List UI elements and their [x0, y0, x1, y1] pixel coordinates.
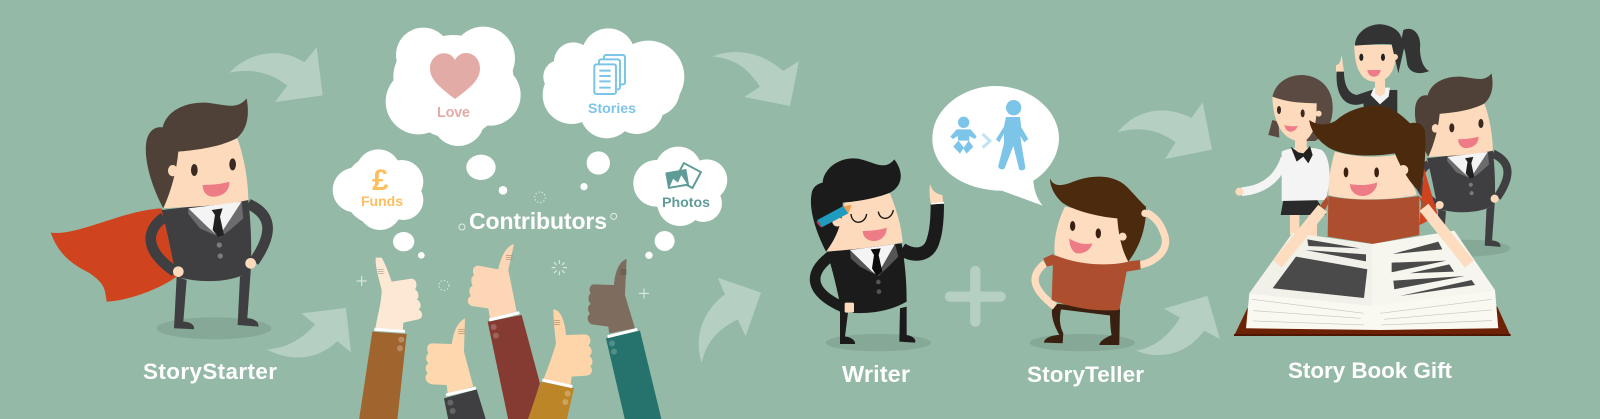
hand 4: mustard sleeve	[528, 309, 592, 419]
cloud: Funds	[333, 149, 423, 230]
arrow: Contributors to Writer bottom	[699, 278, 761, 363]
label: StoryTeller: StoryTeller	[1027, 362, 1144, 387]
speech bubble with baby to adult icons	[932, 86, 1059, 206]
character: StoryTeller	[1030, 177, 1166, 351]
open book	[1234, 231, 1511, 336]
cloud: Funds: £	[372, 164, 389, 197]
label: Writer: Writer	[842, 361, 910, 387]
arrow: StoryTeller to Book top	[1118, 102, 1212, 159]
label: Funds: Funds	[361, 193, 403, 209]
character: StoryStarter superhero	[51, 98, 271, 339]
cloud: Love	[386, 27, 521, 146]
character: boy reading with open book	[1234, 106, 1511, 336]
cloud group: Contributors thoughts	[333, 27, 727, 259]
label: Stories: Stories	[588, 101, 636, 117]
arrow: StoryStarter to Contributors top	[229, 47, 323, 102]
label: Story Book Gift: Story Book Gift	[1288, 358, 1453, 383]
heading: Contributors: Contributors	[469, 208, 607, 234]
label: Love: Love	[437, 105, 470, 121]
character: ponytail woman	[1336, 24, 1429, 115]
icon: baby	[950, 117, 977, 154]
label: Photos: Photos	[662, 195, 710, 211]
arrow: StoryStarter to Contributors bottom	[267, 308, 351, 357]
icon: adult	[996, 100, 1028, 170]
icon: plus sign	[950, 271, 1001, 322]
arrow: StoryTeller to Book bottom	[1136, 296, 1220, 355]
decorative rings	[459, 192, 617, 230]
raised thumbs-up hands	[357, 244, 662, 419]
cloud: Stories	[543, 28, 684, 138]
sparkles	[357, 260, 649, 298]
icon: chevron	[983, 134, 990, 148]
arrow: Contributors to Writer top	[712, 52, 799, 106]
character: Writer	[811, 158, 944, 351]
character: woman in white blouse	[1235, 75, 1333, 237]
hand 1: brown sleeve	[359, 258, 422, 419]
label: StoryStarter: StoryStarter	[143, 359, 277, 384]
hand 5: teal sleeve	[588, 259, 662, 419]
cloud: Photos	[633, 147, 727, 226]
hand 3: maroon sleeve	[468, 244, 540, 419]
hand 2: charcoal sleeve	[425, 318, 486, 419]
thought bubbles	[393, 151, 675, 259]
character: background businessman	[1415, 73, 1510, 256]
